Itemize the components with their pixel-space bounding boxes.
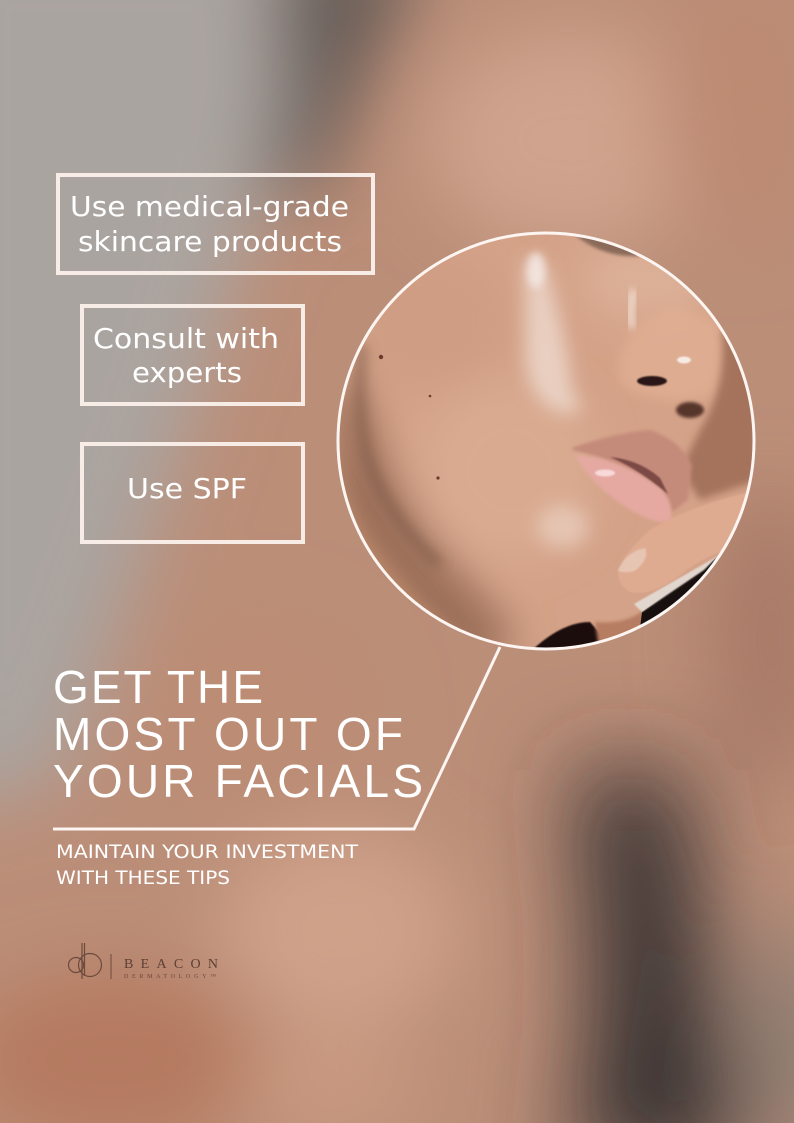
cheek highlights bbox=[525, 259, 589, 549]
moles bbox=[379, 355, 440, 480]
title: MOST OUT OF bbox=[53, 708, 403, 760]
eye crease bbox=[574, 236, 640, 258]
logo: Beacon Dermatology bbox=[68, 943, 218, 980]
lips bbox=[572, 430, 692, 512]
circular photo: close-up of glowing skin bbox=[330, 225, 760, 670]
title: YOUR FACIALS bbox=[53, 755, 423, 807]
soft dark band, lower right bbox=[565, 770, 794, 1123]
tip box: medical-grade skincare: Use medical-grade bbox=[70, 190, 349, 223]
jaw shadow bbox=[360, 345, 440, 565]
logo: Beacon Dermatology: BEACON bbox=[124, 957, 218, 972]
dark card behind finger bbox=[640, 557, 717, 625]
subtitle: MAINTAIN YOUR INVESTMENT bbox=[56, 841, 358, 863]
tip box: consult with experts: Consult with bbox=[93, 322, 279, 355]
title: GET THE bbox=[53, 661, 263, 713]
subtitle: WITH THESE TIPS bbox=[56, 867, 230, 889]
tip box: consult with experts: experts bbox=[132, 356, 242, 389]
lower hand tone bbox=[594, 612, 642, 642]
nose bbox=[623, 320, 718, 396]
dark gap under chin bbox=[534, 621, 600, 648]
tip box: medical-grade skincare bbox=[58, 175, 373, 273]
lower jaw tone bbox=[349, 502, 446, 622]
tip box: use SPF bbox=[82, 444, 303, 542]
callout line from circle to heading rule bbox=[53, 647, 500, 829]
white card bbox=[634, 556, 718, 612]
tip box: medical-grade skincare: skincare products bbox=[78, 225, 342, 258]
title bbox=[53, 661, 423, 807]
icon: monogram bbox=[68, 943, 102, 979]
logo: Beacon Dermatology: DERMATOLOGY™ bbox=[124, 974, 216, 980]
finger bbox=[618, 494, 746, 592]
tip box: use SPF: Use SPF bbox=[127, 472, 247, 505]
tip box: consult with experts bbox=[82, 306, 303, 404]
subtitle bbox=[56, 841, 358, 889]
